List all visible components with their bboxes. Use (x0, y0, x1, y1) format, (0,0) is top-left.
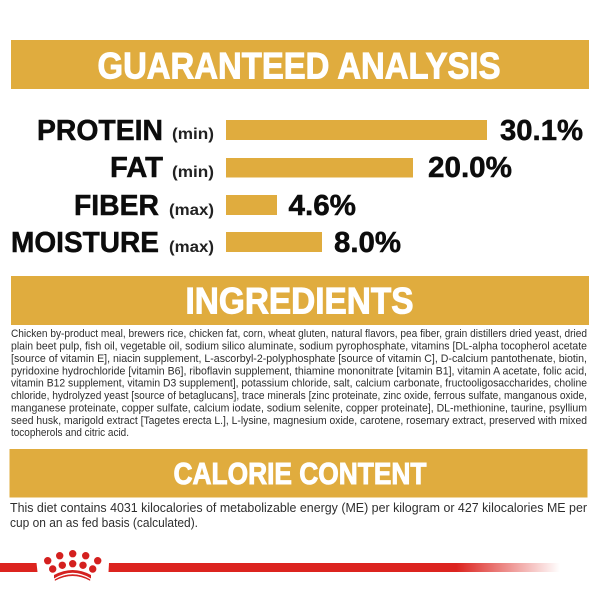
row: fiber (74, 190, 356, 222)
panel: calorie content heading (10, 449, 588, 498)
panel: guaranteed analysis heading (11, 40, 589, 89)
decorative red band left (0, 563, 38, 572)
row: protein (37, 115, 583, 147)
text block: ingredients list: vitamin B12 supplement, vitamin D3 supplement], potassium chloride, salt, calcium carbonate, fructooligosaccharides, choline (11, 378, 587, 390)
row: fat (110, 152, 512, 184)
text block: calorie content (10, 501, 587, 530)
row: fat: 20.0% (428, 152, 512, 184)
row: fat: FAT (110, 152, 163, 184)
red band right with fade (108, 563, 560, 572)
row: moisture: (max) (169, 239, 214, 256)
row: protein: 30.1% (500, 115, 583, 147)
panel: calorie content heading: CALORIE CONTENT (174, 456, 427, 491)
panel: ingredients heading: INGREDIENTS (186, 280, 414, 322)
panel: guaranteed analysis heading: GUARANTEED ANALYSIS (98, 46, 500, 86)
panel: ingredients heading (11, 276, 589, 325)
bar chart: guaranteed analysis (11, 115, 583, 259)
row: fat: (min) (172, 164, 214, 181)
text block: ingredients list: [source of vitamin E], niacin supplement, L-ascorbyl-2-polyphosphate [source of vitamin C], D-calcium pantothenate, biotin, (11, 353, 587, 365)
text block: ingredients list: tocopherols and citric acid. (11, 427, 129, 439)
row: protein: PROTEIN (37, 115, 163, 147)
text block: calorie content: This diet contains 4031 kilocalories of metabolizable energy (ME) per kilogram or 427 kilocalories ME per (10, 501, 587, 515)
text block: ingredients list (11, 328, 587, 439)
row: fiber: FIBER (74, 190, 159, 222)
row: moisture: MOISTURE (11, 227, 159, 259)
row: moisture: 8.0% (334, 227, 401, 259)
text block: ingredients list: plain beet pulp, fish oil, vegetable oil, sodium silico aluminate, sodium pyrophosphate, vitamins [DL-alpha tocopherol acetate (11, 340, 587, 352)
row: moisture (11, 227, 401, 259)
icon: royal canin crown logo (44, 550, 101, 580)
text block: ingredients list: seed husk, marigold extract [Tagetes erecta L.], L-lysine, magnesium oxide, carotene, rosemary extract, preserved with mixed (11, 415, 587, 427)
text block: calorie content: cup on an as fed basis (calculated). (10, 516, 198, 530)
text block: ingredients list: pyridoxine hydrochloride [vitamin B6], riboflavin supplement, thiamine mononitrate [vitamin B1], vitamin A acetate, folic acid, (11, 365, 587, 377)
text block: ingredients list: manganese proteinate, copper sulfate, calcium iodate, sodium selenite, copper proteinate], DL-methionine, taurine, psyllium (11, 402, 587, 414)
row: fiber: 4.6% (288, 190, 356, 222)
row: protein: (min) (172, 126, 214, 143)
row: fiber: (max) (169, 202, 214, 219)
